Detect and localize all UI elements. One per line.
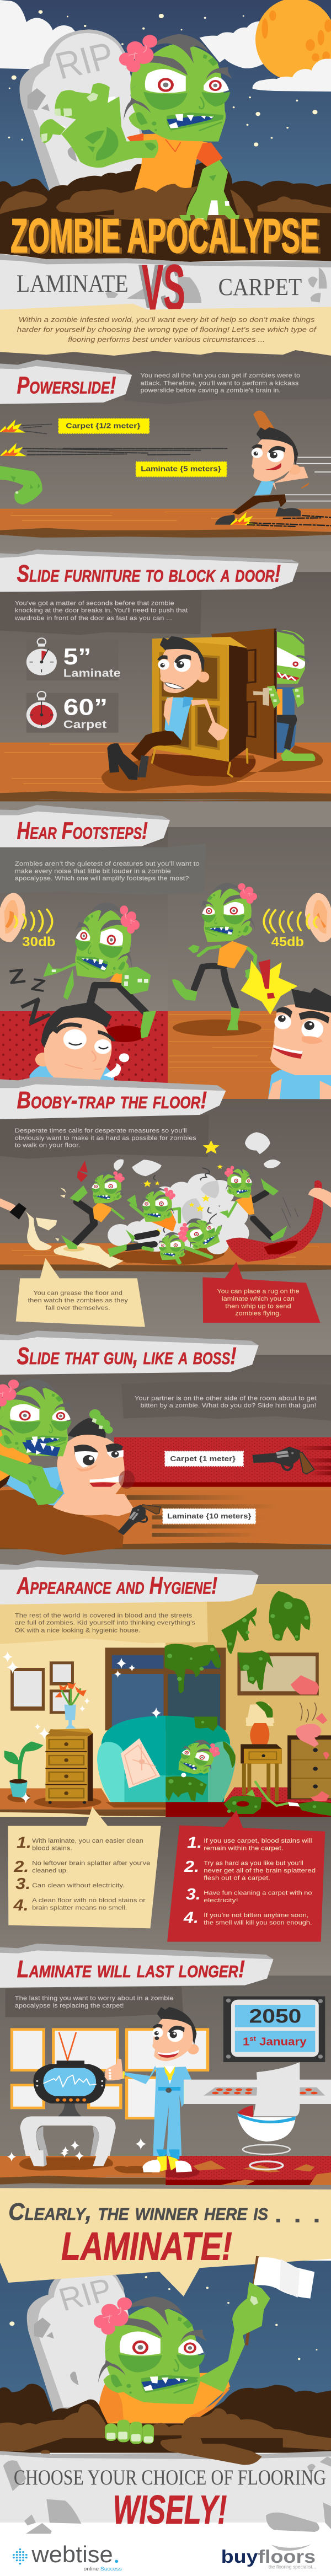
heading banner: Booby-trap the floor! [17,1087,207,1113]
left wall [0,827,168,1033]
dirty wall [166,1584,331,1817]
floor split [0,2156,331,2186]
exclamation burst [241,959,298,1015]
window [105,1647,226,1730]
carpet list callout: 3. [186,1886,201,1903]
wardrobe [152,637,247,776]
heading banner: Laminate will last longer! [17,1956,245,1982]
clean drawer cabinet [35,1715,93,1804]
strip left of section start [0,551,331,572]
zzz snore letters [7,964,56,1032]
man in futuristic suit [104,2007,199,2156]
calendar panel [223,1997,325,2062]
open door with zombie [211,629,315,761]
man pushing wardrobe [107,632,228,780]
right laminate floor [168,1011,331,1099]
laminate list callout [8,1807,161,1928]
panel: title band: VS [142,251,185,324]
shocked man's shirt [268,1075,331,1099]
cream verdict speech bubble [0,2188,331,2296]
icon: middle cloud [200,21,266,68]
description [14,599,188,621]
control desk [184,2080,331,2104]
tombstone with RIP: RIP [51,34,119,87]
door handle [253,688,269,706]
heading banner [0,1330,259,1375]
dirt front mounds [0,184,331,217]
panel: booby-trap the floor [0,1068,331,1355]
panel: title band: VS [138,251,181,321]
pale laminate vs carpet band [0,254,331,331]
shocked man [268,988,331,1099]
logo: webtise: webtise [31,2541,113,2567]
label: carpet: CARPET [218,274,302,300]
carpet list callout: never get all of the brain splattered [204,1867,316,1874]
text backing panel [0,1602,208,1644]
stopwatch: five seconds laminate: 5” [63,643,91,669]
intro text: flooring performs best under various circumstances ... [68,336,265,344]
floor [0,743,331,801]
callout: rug [202,1262,320,1323]
tombstone with RIP [19,29,152,191]
calendar panel: 2050 [249,2005,301,2027]
heading banner: Hear Footsteps! [17,818,148,844]
tombstone [27,2263,146,2412]
zombie shirt [98,2372,230,2423]
man's shoes [142,2149,192,2172]
calendar panel: 1 [243,2035,250,2048]
panel: slide that gun [0,1330,331,1584]
text backing panel [0,844,206,895]
text backing panel [121,1382,331,1421]
bone shards [3,2456,331,2534]
dust cloud [108,1132,281,1254]
picture frames [3,1651,74,1714]
icon: orange moon [255,0,331,81]
calendar panel: st [249,2035,257,2042]
label: carpet one meter: Carpet {1 meter} [170,1455,236,1463]
panel: title band [0,208,331,331]
panel: hear footsteps [0,798,331,1099]
description: Your partner is on the other side of the room about to get [135,1394,317,1402]
label: 45db: 45db [271,935,304,949]
sliding man with bat [215,411,331,527]
logo: webtise: online Success [84,2567,122,2572]
lower floor band [0,799,331,827]
zombie rising from the grave [0,34,331,239]
label: 30db: 30db [22,935,56,949]
description: The rest of the world is covered in blood and the streets [15,1612,192,1619]
heading banner [0,550,298,592]
intro torn edge [0,344,331,356]
futuristic chair [237,2062,300,2154]
panel: powerslide [0,344,331,572]
zombie arm chasing [0,466,42,505]
logo: webtise [13,2541,122,2572]
description [140,372,301,394]
calendar panel: January [256,2035,307,2048]
heading banner [0,1068,226,1119]
flying zombie 4 [220,1166,298,1242]
table legs and sparkles [7,2149,283,2170]
zombie surrender [94,2256,314,2423]
zombie head [119,34,232,142]
clean wall [0,1584,166,1817]
text backing panel [6,1987,183,2017]
label: carpet half meter: Carpet {1/2 meter} [66,422,141,430]
icon: left cloud [0,0,80,70]
icon: right ear with sound waves [264,893,331,942]
sleeping man [30,1002,129,1083]
conclusion line: Clearly, the winner here is [8,2198,268,2225]
description: OK with a nice looking & hygienic house. [15,1627,140,1634]
panel: introduction [0,304,331,356]
panel: hero night sky [0,0,331,221]
dirty lamp [241,1718,282,1805]
shocked man's arms [268,1079,331,1099]
stopwatch: sixty seconds carpet: 60” [63,694,108,720]
label: laminate five meters: Laminate {5 meters} [141,465,221,473]
dirty picture frame with slime [237,1650,327,1726]
stars [9,2262,318,2360]
heading banner [0,805,170,849]
zombie big clawed hand [40,83,158,168]
heading banner [0,360,132,404]
panel: lists of laminate and carpet [0,1807,331,1976]
laminate list callout: blood stains. [32,1844,72,1852]
zombie biting man [0,1379,135,1555]
callout: rug: zombies flying. [235,1310,281,1317]
text backing panel [0,1115,209,1159]
description [15,1994,174,2009]
carpet strip [114,1437,331,1487]
laminate list callout: 1. [17,1834,31,1852]
description: knocking at the door breaks in. You’ll need to push that [15,607,188,614]
grey band shadow [0,254,331,267]
description: You’ve got a matter of seconds before that zombie [15,599,174,607]
speed lines [285,457,331,501]
carpet list callout: remain within the carpet. [204,1844,284,1852]
stopwatch: five seconds laminate [26,638,121,680]
laminate list callout: A clean floor with no blood stains or [32,1897,146,1904]
grease spill with hand and bottle [0,1198,124,1268]
carpet list callout: If you use carpet, blood stains will [204,1837,312,1844]
dirty cabinet with brains [287,1724,331,1801]
description: to walk on your floor. [15,1141,80,1149]
callout: rug: You can place a rug on the [217,1287,300,1295]
label: laminate ten meters [163,1509,255,1523]
carpet list callout: 2. [184,1858,199,1875]
floor [0,1243,331,1272]
stopwatch: sixty seconds carpet [26,691,119,733]
heading banner [0,1560,259,1604]
stars [8,10,318,147]
description [15,1612,195,1634]
clean floor [0,1788,166,1816]
falling zombie 2 [108,1188,179,1257]
dirt back mound [0,162,331,239]
dirt spill over band [169,2451,261,2465]
wall panels [12,2030,208,2118]
retro tv [33,2033,105,2117]
laminate zombie walking loud [172,883,261,1036]
potted plant [4,1741,43,1804]
description: make every noise that little bit louder in a zombie [15,867,171,874]
zombie arm across man [0,1455,63,1505]
VS badge [138,251,185,324]
carpet list callout: 1. [187,1834,202,1852]
description: are full of zombies. Kid yourself into thinking everything’s [15,1619,195,1626]
slime on dirty wall and window [164,1591,310,1693]
dirty floor [166,1788,331,1817]
description: apocalypse is replacing the carpet! [15,2002,124,2009]
label: carpet one meter [165,1451,243,1466]
callout: grease [16,1258,145,1327]
heading banner [0,1944,274,1988]
laminate list callout: cleaned up. [32,1867,68,1874]
zombie body [267,630,315,761]
zzz snore letters: Z [14,990,56,1032]
description: Zombies aren’t the quietest of creatures but you’ll want to [15,860,200,867]
text backing panel [0,591,201,635]
description: wardrobe in front of the door as fast as you can ... [14,614,172,621]
pile zombies [143,1212,223,1263]
stopwatch: sixty seconds carpet: Carpet [63,718,107,731]
laminate strip [0,1487,331,1584]
winner word: LAMINATE! [61,2224,232,2268]
footprint marks [105,267,327,303]
intro text: harder for yourself by choosing the wrong type of flooring! Let’s see which type of [17,326,317,334]
panel: choose wisely footer band [0,2451,331,2534]
description: The last thing you want to worry about in a zombie [15,1994,174,2001]
zombie fingers [105,2420,154,2444]
laminate list callout: 2. [13,1858,29,1875]
panel: slide furniture to block a door [0,550,331,827]
description: bitten by a zombie. What do you do? Slide him that gun! [140,1402,316,1409]
logo: buyfloors: the flooring specialist... [269,2564,316,2570]
left carpet floor [0,1011,168,1083]
clean flowers and vase [55,1683,90,1720]
laminate list callout: With laminate, you can easier clean [32,1837,143,1844]
slipping zombie 1 [61,1171,125,1249]
skid mark laminate with flame [0,443,227,456]
laminate list callout: 3. [15,1875,30,1892]
zombie head [94,2296,207,2404]
man head [57,1418,135,1507]
laminate list callout: Can clean without electricity. [32,1882,125,1889]
icon: revolver on carpet [253,1447,314,1474]
zombie lower arm and skeletal hand [186,160,239,221]
label: carpet half meter [58,418,149,433]
icon: right cloud over moon [252,59,331,92]
big zombie head [0,1379,73,1456]
description: You need all the fun you can get if zombies were to [140,372,301,379]
man hand and second revolver [53,1494,163,1541]
description: apocalypse. Which one will amplify footsteps the most? [15,874,189,882]
white table [20,2116,146,2174]
laminate list callout: 4. [13,1897,29,1914]
callout: grease: then watch the zombies as they [28,1297,128,1304]
zombie shirt [127,133,223,195]
slime on sofa and severed zombie head [166,1716,236,1801]
label: laminate ten meters: Laminate {10 meters} [167,1512,252,1520]
panel: footer logos [0,2534,331,2576]
dark dirt band with torn edge [0,215,331,262]
carpet list callout [167,1810,325,1942]
laminate list callout: brain splatter means no smell. [32,1904,127,1911]
laminate list callout: No leftover brain splatter after you’ve [32,1859,151,1866]
label: laminate: LAMINATE [17,270,129,298]
panel: laminate will last longer [0,1944,331,2188]
intro text: Within a zombie infested world, you’ll want every bit of help so don’t make things [19,316,315,324]
ellipsis dots: ... [274,2201,321,2228]
heading banner: Appearance and Hygiene! [17,1573,217,1599]
right wall [168,827,331,1033]
label: laminate five meters [136,462,227,476]
description: obviously want to make it as hard as possible for zombies [15,1134,196,1141]
carpet list callout: Try as hard as you like but you’ll [204,1859,303,1866]
zzz snore letters: Z [7,964,27,989]
panel: appearance and hygiene [0,1560,331,1817]
whipped rug with hand [226,1180,331,1262]
stopwatch: five seconds laminate: Laminate [63,667,121,679]
sky [0,2261,331,2426]
panel: conclusion night scene [0,2185,331,2465]
zombie bared teeth [22,1440,60,1457]
carpet zombie stomping quietly [43,898,156,1042]
description [15,1127,196,1149]
dirt mounds [0,2384,331,2465]
carpet list callout: If you’re not bitten anytime soon, [204,1912,308,1919]
grey band [0,2454,331,2523]
description [135,1394,317,1409]
floor underside [0,798,331,801]
tombstone: RIP [55,2272,116,2318]
zombie hand on hair [89,1409,113,1434]
description: powerslide before caving a zombie's brain in. [140,387,281,394]
carpet list callout: the smell will kill you soon enough. [204,1919,312,1926]
arm with white flag [196,2256,314,2392]
carpet list callout: flesh out of a carpet. [204,1874,270,1881]
logo: buyfloors: buyfloors [221,2546,316,2567]
sofa [97,1708,236,1807]
heading banner: Powerslide! [17,372,116,399]
intro text [17,316,317,344]
carpet list callout: 4. [183,1909,199,1926]
wisely word: WISELY! [113,2487,227,2532]
description: attack. Therefore, you'll want to perform a kickass [140,379,299,387]
stars and impact marks [55,1140,223,1242]
description: Desperate times calls for desperate measures so you'll [15,1127,187,1134]
text backing panel [122,363,331,404]
skid mark carpet with flame [0,420,52,434]
callout: rug: then whip up to send [225,1302,291,1310]
icon: left ear with sound waves [0,893,52,942]
callout: grease: You can grease the floor and [33,1289,122,1296]
callout: rug: laminate which you can [222,1295,295,1302]
callout: grease: fall over themselves. [46,1304,110,1311]
carpet list callout: electricity! [204,1897,238,1904]
slime puddle and severed limb [224,1782,331,1816]
band shadow [0,2451,331,2459]
zzz snore letters: Z [29,975,47,996]
floor [0,509,331,538]
carpet list callout: Have fun cleaning a carpet with no [204,1889,312,1896]
description [15,860,200,882]
light dirt and fingers above title [95,215,253,224]
